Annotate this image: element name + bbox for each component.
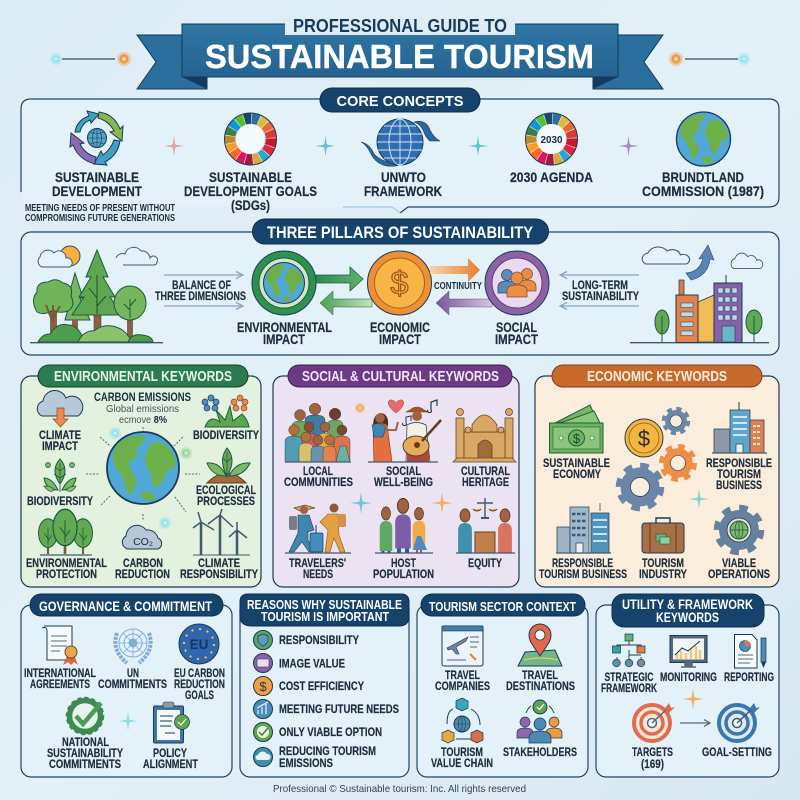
- icon: monitoring screen: [670, 636, 707, 667]
- icon: sparkle: [118, 711, 138, 731]
- list item: only viable option: ONLY VIABLE OPTION: [279, 727, 382, 739]
- icon: travelers with luggage: [285, 504, 351, 553]
- label: SDGs: [184, 169, 317, 213]
- label: national sustainability commitments: COMMITMENTS: [49, 759, 121, 771]
- label: social impact: SOCIAL: [496, 319, 537, 335]
- label: 2030 agenda: 2030 AGENDA: [510, 169, 593, 185]
- label: environmental protection: PROTECTION: [36, 569, 97, 581]
- heading: social: SOCIAL & CULTURAL KEYWORDS: [302, 369, 499, 385]
- icon: banknotes: $: [573, 431, 581, 446]
- label: SDGs: SUSTAINABLE: [209, 169, 292, 185]
- label: social well-being: WELL-BEING: [374, 477, 433, 489]
- label: travelers' needs: [289, 558, 346, 581]
- icon: biodiversity flowers: [202, 395, 249, 427]
- label: environmental impact: [237, 319, 332, 347]
- label: EU carbon reduction goals: [174, 668, 225, 702]
- decoration: left connector dots: [49, 51, 132, 67]
- label: strategic framework: FRAMEWORK: [601, 683, 658, 695]
- icon: sparkle: [618, 136, 638, 156]
- label: climate impact: IMPACT: [42, 441, 78, 453]
- label: cultural heritage: CULTURAL: [461, 466, 510, 478]
- arrow: purple left: [436, 291, 492, 315]
- label: SDGs: (SDGs): [231, 197, 270, 213]
- label: economic impact: ECONOMIC: [370, 319, 430, 335]
- icon: social well-being musicians: [368, 400, 441, 462]
- label: sustainable economy: [543, 458, 610, 481]
- label: host population: HOST: [391, 558, 416, 570]
- icon: value chain: [442, 698, 483, 743]
- icon: UN emblem: [115, 629, 151, 663]
- list item: cost efficiency: [254, 676, 364, 696]
- label: travelers' needs: NEEDS: [303, 569, 333, 581]
- label: international agreements: AGREEMENTS: [30, 679, 90, 691]
- label: responsible tourism business upper: [706, 458, 772, 492]
- label: environmental protection: [26, 558, 107, 581]
- label: Brundtland Commission: BRUNDTLAND: [662, 169, 744, 185]
- icon: suitcase: [642, 518, 684, 553]
- callout: carbon emissions: ecmove 8%: [119, 414, 168, 426]
- icon: sparkle: [164, 136, 184, 156]
- icon: cultural heritage palace: [453, 408, 516, 462]
- icon: buildings lower: [556, 503, 611, 553]
- label: viable operations: OPERATIONS: [708, 569, 770, 581]
- label: sustainable economy: SUSTAINABLE: [543, 458, 610, 470]
- icon: agreement scroll with ribbon: [42, 626, 78, 665]
- icon: coin and gears: $: [638, 426, 650, 451]
- label: sustainable development: MEETING NEEDS OF PRESENT WITHOUT: [25, 203, 175, 214]
- label: travelers' needs: TRAVELERS': [289, 558, 346, 570]
- heading: economic: ECONOMIC KEYWORDS: [587, 369, 727, 385]
- label: tourism value chain: VALUE CHAIN: [431, 758, 493, 770]
- icon: target blue: [719, 703, 760, 741]
- label: social impact: [495, 319, 538, 347]
- icon: wind turbines: [193, 509, 250, 555]
- icon: leaves: [44, 459, 76, 492]
- list item: reducing tourism emissions: REDUCING TOURISM: [279, 746, 376, 758]
- label: carbon reduction: [115, 558, 170, 581]
- label: ecological processes: PROCESSES: [197, 496, 255, 508]
- panel: utility and framework keywords: [596, 594, 779, 777]
- text: balance of three dimensions: BALANCE OF: [172, 280, 231, 292]
- list item: reducing tourism emissions: EMISSIONS: [279, 758, 333, 770]
- heading: reasons: TOURISM IS IMPORTANT: [261, 610, 389, 624]
- illustration: forest: [30, 246, 163, 343]
- label: responsible tourism business upper: TOURISM: [717, 469, 761, 481]
- label: EU carbon reduction goals: REDUCTION: [174, 679, 225, 691]
- list item: only viable option: [254, 722, 382, 742]
- label: EU carbon reduction goals: GOALS: [185, 690, 214, 702]
- heading: environmental: ENVIRONMENTAL KEYWORDS: [54, 369, 232, 385]
- label: viable operations: VIABLE: [722, 558, 756, 570]
- label: monitoring: MONITORING: [660, 672, 717, 684]
- list item: reducing tourism emissions: [254, 746, 376, 770]
- icon: banknotes: [550, 405, 603, 453]
- icon: ecological plant: [207, 448, 250, 483]
- heading: three pillars: [252, 219, 548, 244]
- illustration: green city with rising arrow: [630, 245, 769, 343]
- heading: utility: [612, 594, 764, 627]
- title eyebrow: PROFESSIONAL GUIDE TO: [293, 16, 507, 36]
- label: international agreements: INTERNATIONAL: [24, 668, 96, 680]
- arrow: long-term bottom: [560, 302, 639, 310]
- label: national sustainability commitments: NATIONAL: [62, 737, 109, 749]
- label: sustainable economy: ECONOMY: [553, 469, 601, 481]
- list item: image value: IMAGE VALUE: [279, 658, 345, 670]
- arrow: targets to goal-setting: [680, 720, 710, 726]
- label: environmental protection: ENVIRONMENTAL: [26, 558, 107, 570]
- label: UNWTO framework: FRAMEWORK: [364, 183, 442, 199]
- label: cultural heritage: HERITAGE: [462, 477, 509, 489]
- label: strategic framework: STRATEGIC: [604, 672, 654, 684]
- label: sustainable development: COMPROMISING FUTURE GENERATIONS: [25, 213, 175, 224]
- icon: social circle: [485, 251, 549, 315]
- decoration: orange glow: [354, 402, 366, 414]
- label: policy alignment: ALIGNMENT: [143, 759, 198, 771]
- main title: SUSTAINABLE TOURISM: [205, 39, 594, 76]
- heading: reasons: [240, 594, 409, 626]
- icon: equity scales: [456, 498, 515, 553]
- label: economic impact: IMPACT: [379, 331, 421, 347]
- icon: sparkle: [316, 136, 336, 156]
- arrow: green left: [320, 291, 372, 315]
- icon: SDG colour wheel: [224, 113, 276, 165]
- label: ecological processes: [196, 485, 256, 508]
- panel: core concepts: [21, 88, 779, 224]
- heading: utility: UTILITY & FRAMEWORK: [622, 597, 753, 612]
- label: travel destinations: [506, 670, 575, 693]
- list item: meeting future needs: [254, 700, 399, 718]
- heading: core concepts: [320, 88, 480, 112]
- decoration: glow dots: [108, 426, 193, 530]
- heading: environmental: [38, 365, 248, 387]
- label: viable operations: [708, 558, 770, 581]
- heading: reasons: REASONS WHY SUSTAINABLE: [247, 598, 402, 612]
- icon: policy clipboard: [154, 702, 190, 743]
- icon: national check seal: [67, 698, 103, 734]
- panel: environmental keywords: [21, 365, 261, 587]
- label: responsible tourism business lower: TOURISM BUSINESS: [539, 569, 627, 581]
- heading: utility: KEYWORDS: [656, 610, 719, 625]
- decoration: radial dashes: [86, 427, 200, 521]
- icon: target red: [634, 703, 675, 741]
- label: national sustainability commitments: [47, 737, 123, 771]
- icon: map pin: [518, 624, 562, 666]
- icon: CO2 cloud: CO₂: [133, 536, 153, 548]
- label: tourism value chain: TOURISM: [441, 747, 483, 759]
- icon: 2030 wheel: [526, 113, 578, 165]
- icon: UNWTO globe: [361, 119, 440, 166]
- heading: core concepts: CORE CONCEPTS: [336, 93, 464, 110]
- label: strategic framework: [601, 672, 658, 695]
- callout: carbon emissions: Global emissions: [106, 403, 179, 415]
- label: responsible tourism business upper: RESPONSIBLE: [706, 458, 772, 470]
- list item: responsibility: [254, 630, 359, 650]
- label: travel destinations: TRAVEL: [522, 670, 558, 682]
- list item: meeting future needs: MEETING FUTURE NEEDS: [279, 704, 399, 716]
- heading: social: [288, 365, 512, 387]
- label: international agreements: [24, 668, 96, 691]
- label: UNWTO framework: UNWTO: [381, 169, 426, 185]
- panel: governance and commitment: [21, 594, 232, 777]
- icon: EU emblem: [179, 624, 219, 664]
- label: national sustainability commitments: SUSTAINABILITY: [47, 748, 123, 760]
- title banner: [137, 16, 663, 89]
- label: responsible tourism business lower: RESPONSIBLE: [552, 558, 613, 570]
- label: targets: TARGETS: [632, 747, 673, 759]
- icon: stakeholders: [517, 700, 562, 743]
- label: tourism industry: [639, 558, 687, 581]
- icon: EU emblem: EU: [190, 637, 208, 652]
- label: host population: POPULATION: [373, 569, 434, 581]
- text: balance of three dimensions: THREE DIMENSIONS: [155, 291, 246, 303]
- label: UN commitments: COMMITMENTS: [98, 679, 167, 691]
- icon: CO2 cloud: [122, 525, 162, 549]
- heading: three pillars: THREE PILLARS OF SUSTAINABILITY: [267, 223, 534, 242]
- label: Brundtland Commission: [642, 169, 764, 199]
- arrow: long-term top: [560, 272, 639, 278]
- label: climate impact: [39, 430, 81, 453]
- arrow: green right: [316, 267, 363, 291]
- text: long-term sustainability: LONG-TERM: [572, 280, 628, 292]
- label: policy alignment: POLICY: [153, 748, 187, 760]
- list item: cost efficiency: $: [259, 679, 267, 694]
- arrow: balance top: [164, 272, 243, 278]
- icon: host population: [375, 498, 433, 553]
- label: biodiversity right: BIODIVERSITY: [193, 430, 259, 442]
- panel: reasons why sustainable tourism is important: [240, 594, 409, 777]
- label: goal-setting: GOAL-SETTING: [702, 747, 772, 759]
- label: Brundtland Commission: COMMISSION (1987): [642, 183, 764, 199]
- label: climate impact: CLIMATE: [39, 430, 81, 442]
- icon: economic circle: $: [390, 265, 409, 301]
- list item: cost efficiency: COST EFFICIENCY: [279, 681, 364, 693]
- icon: forest trio: [38, 509, 92, 555]
- label: climate responsibility: RESPONSIBILITY: [180, 569, 258, 581]
- icon: 2030 wheel: 2030: [540, 134, 563, 146]
- callout: carbon emissions: CARBON EMISSIONS: [94, 392, 191, 404]
- icon: climate impact cloud: [37, 391, 83, 427]
- icon: sparkles: [350, 492, 453, 514]
- label: climate responsibility: CLIMATE: [198, 558, 240, 570]
- label: local communities: COMMUNITIES: [284, 477, 353, 489]
- text: long-term sustainability: SUSTAINABILITY: [562, 291, 639, 303]
- label: travel companies: COMPANIES: [435, 681, 490, 693]
- label: targets: (169): [641, 759, 664, 771]
- icon: central globe: [107, 432, 179, 504]
- icon: buildings upper: [712, 402, 767, 453]
- text: continuity: CONTINUITY: [434, 281, 482, 292]
- label: ecological processes: ECOLOGICAL: [196, 485, 256, 497]
- label: tourism value chain: [431, 747, 493, 770]
- label: environmental impact: IMPACT: [263, 331, 305, 347]
- label: UN commitments: [98, 668, 167, 691]
- icon: environmental circle: [252, 251, 316, 315]
- list item: responsibility: RESPONSIBILITY: [279, 635, 359, 647]
- heading: governance: GOVERNANCE & COMMITMENT: [39, 598, 212, 614]
- icon: report and pen: [734, 634, 766, 668]
- icon: booking window: [442, 626, 483, 666]
- label: tourism industry: TOURISM: [642, 558, 684, 570]
- label: UN commitments: UN: [127, 668, 139, 680]
- label: policy alignment: [143, 748, 198, 771]
- arrow: orange right: [430, 258, 480, 282]
- label: SDGs: DEVELOPMENT GOALS: [184, 183, 317, 199]
- icon: sparkle: [689, 489, 709, 509]
- label: sustainable development: DEVELOPMENT: [52, 183, 142, 199]
- label: social well-being: SOCIAL: [386, 466, 421, 478]
- icon: sparkle: [682, 688, 704, 710]
- label: local communities: LOCAL: [303, 466, 333, 478]
- heading: governance: [30, 594, 223, 616]
- label: travel destinations: DESTINATIONS: [506, 681, 575, 693]
- label: carbon reduction: REDUCTION: [115, 569, 170, 581]
- label: carbon reduction: CARBON: [123, 558, 163, 570]
- label: stakeholders: STAKEHOLDERS: [503, 747, 577, 759]
- icon: earth: [676, 112, 730, 166]
- panel: three pillars: [21, 219, 779, 355]
- heading: economic: [552, 365, 762, 387]
- label: reporting: REPORTING: [724, 672, 774, 684]
- label: cultural heritage: [461, 466, 510, 489]
- text: balance of three dimensions: [155, 280, 246, 303]
- label: social impact: IMPACT: [495, 331, 538, 347]
- label: UNWTO framework: [364, 169, 442, 199]
- heading: tourism sector: TOURISM SECTOR CONTEXT: [429, 599, 576, 614]
- icon: coin and gears: [619, 409, 694, 508]
- icon: sparkle: [468, 136, 488, 156]
- panel: tourism sector context: [417, 594, 588, 777]
- panel: social and cultural keywords: [273, 365, 519, 587]
- label: sustainable development: [25, 169, 175, 224]
- icon: viable operations gear: [717, 508, 761, 552]
- panel: economic keywords: [535, 365, 779, 587]
- label: biodiversity left: BIODIVERSITY: [27, 496, 93, 508]
- label: targets: [632, 747, 673, 771]
- label: tourism industry: INDUSTRY: [639, 569, 687, 581]
- label: social well-being: [374, 466, 433, 489]
- decoration: right connector dots: [668, 51, 751, 67]
- label: travel companies: [435, 670, 490, 693]
- label: economic impact: [370, 319, 430, 347]
- icon: local communities group: [285, 403, 351, 462]
- label: EU carbon reduction goals: EU CARBON: [174, 668, 225, 680]
- label: environmental impact: ENVIRONMENTAL: [237, 319, 332, 335]
- icon: recycling arrows around globe: [70, 111, 123, 165]
- arrow: balance bottom: [164, 302, 243, 310]
- list item: image value: [254, 654, 345, 672]
- callout: carbon emissions: [94, 392, 191, 426]
- label: local communities: [284, 466, 353, 489]
- label: equity: EQUITY: [468, 558, 502, 570]
- label: responsible tourism business upper: BUSINESS: [716, 480, 762, 492]
- text: long-term sustainability: [562, 280, 639, 303]
- icon: economic circle: [368, 251, 432, 315]
- icon: strategic framework chart: [612, 634, 645, 667]
- label: host population: [373, 558, 434, 581]
- footer: Professional © Sustainable tourism: Inc. All rights reserved: [273, 783, 526, 795]
- label: sustainable development: SUSTAINABLE: [55, 169, 139, 185]
- label: climate responsibility: [180, 558, 258, 581]
- label: travel companies: TRAVEL: [445, 670, 480, 682]
- heading: tourism sector: [421, 594, 585, 616]
- label: responsible tourism business lower: [539, 558, 627, 581]
